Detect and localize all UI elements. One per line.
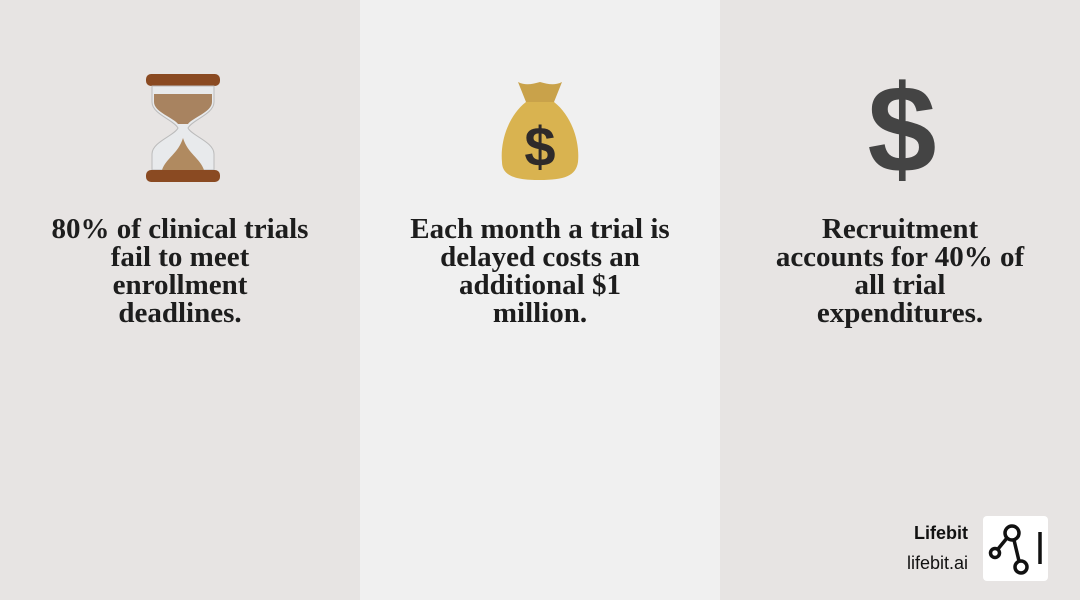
text: stat 3: Recruitment xyxy=(822,213,978,245)
text: stat 3: accounts for 40% of xyxy=(776,241,1024,273)
panel: enrollment xyxy=(0,0,360,600)
icon: money bag xyxy=(502,82,578,180)
icon: money bag: $ xyxy=(524,115,556,178)
text: stat 3 xyxy=(776,213,1024,329)
text: stat 2: Each month a trial is xyxy=(410,213,670,245)
brand text: lifebit.ai xyxy=(907,553,968,573)
text: stat 3: all trial xyxy=(854,269,946,301)
brand text xyxy=(907,523,968,573)
text: stat 1: 80% of clinical trials xyxy=(52,213,308,245)
brand: Lifebit xyxy=(907,516,1048,581)
text: stat 3: expenditures. xyxy=(817,297,983,329)
text: stat 1: deadlines. xyxy=(118,297,242,329)
text: stat 1 xyxy=(52,213,308,329)
text: stat 1: enrollment xyxy=(113,269,247,301)
text: stat 2: million. xyxy=(493,297,587,329)
text: stat 2 xyxy=(410,213,670,329)
brand text: Lifebit xyxy=(914,523,968,543)
icon: logo xyxy=(983,516,1048,581)
text: stat 2: delayed costs an xyxy=(440,241,640,273)
panel: delay cost xyxy=(360,0,720,600)
text: stat 2: additional $1 xyxy=(459,269,621,301)
icon: hourglass xyxy=(146,74,220,182)
panel: recruitment xyxy=(720,0,1080,600)
text: stat 1: fail to meet xyxy=(111,241,249,273)
